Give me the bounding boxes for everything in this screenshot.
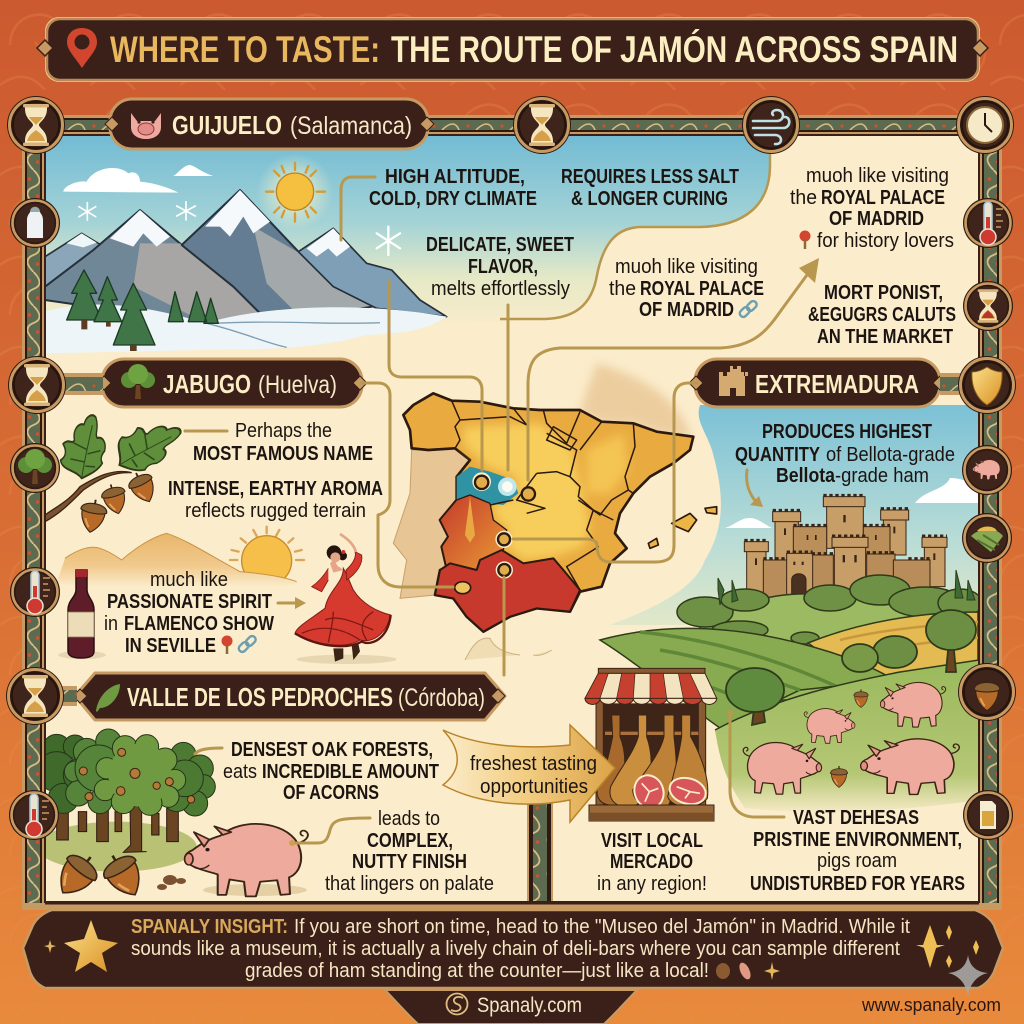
icon: small sparkle bbox=[44, 940, 56, 953]
text: highest quantity bbox=[735, 420, 955, 487]
icon: clock bbox=[956, 96, 1014, 154]
Extremadura bbox=[440, 495, 507, 570]
illustration: oak branch bbox=[45, 408, 188, 534]
text: dehesas: PRISTINE ENVIRONMENT, bbox=[753, 828, 962, 851]
icon: tree bbox=[121, 364, 155, 399]
icon: wine bottle bbox=[58, 569, 106, 659]
text: market: AN THE MARKET bbox=[817, 325, 953, 348]
text: mercado: VISIT LOCAL bbox=[601, 829, 703, 852]
text: mercado: MERCADO bbox=[610, 850, 693, 873]
text: flamenco bbox=[104, 568, 275, 657]
icon: sparkles bbox=[916, 925, 979, 968]
panel: Jabugo bbox=[45, 359, 397, 664]
text: royal palace history bbox=[790, 164, 954, 252]
icon: leaf bbox=[96, 684, 120, 712]
region borders bbox=[452, 401, 635, 590]
text: highest quantity: QUANTITY bbox=[735, 443, 820, 466]
text: nutty finish: NUTTY FINISH bbox=[352, 850, 467, 873]
Portugal bbox=[393, 448, 470, 598]
plate: Jabugo heading: JABUGO bbox=[163, 369, 251, 399]
connector: dehesas bbox=[727, 710, 784, 817]
icon: wind bbox=[742, 96, 800, 154]
text: most famous: MOST FAMOUS NAME bbox=[193, 442, 373, 465]
icon: pig bbox=[962, 445, 1012, 495]
illustration: mountains and snow bbox=[45, 153, 447, 353]
icon: field bbox=[962, 513, 1012, 563]
text: highest quantity: Bellota bbox=[776, 464, 836, 487]
text: flavor: melts effortlessly bbox=[431, 277, 571, 300]
text: insight: grades of ham standing at the counter—just like a local! bbox=[245, 960, 709, 982]
divider: market column bbox=[527, 790, 553, 908]
icons: pin and link bbox=[222, 635, 257, 654]
text: highest quantity: PRODUCES HIGHEST bbox=[762, 420, 932, 443]
icon: hourglass top left bbox=[7, 96, 65, 154]
frame bands bbox=[22, 115, 1002, 910]
icon: cheese card bbox=[963, 790, 1013, 840]
text: highest quantity: -grade ham bbox=[835, 464, 929, 487]
text: highest quantity: of Bellota-grade bbox=[826, 443, 955, 466]
text: curing bbox=[561, 165, 739, 210]
text: oak forests: DENSEST OAK FORESTS, bbox=[231, 738, 433, 761]
text: flamenco: FLAMENCO SHOW bbox=[124, 612, 275, 635]
arrow: to dancer bbox=[278, 597, 306, 609]
text: aroma: INTENSE, EARTHY AROMA bbox=[168, 477, 383, 500]
text: most famous bbox=[193, 419, 373, 465]
plate: Valle heading: VALLE DE LOS PEDROCHES bbox=[127, 682, 393, 712]
text: royal palace: ROYAL PALACE bbox=[640, 277, 764, 300]
icon: thermometer right bbox=[963, 198, 1013, 248]
text: market: MORT PONIST, bbox=[824, 281, 943, 304]
text: insight: If you are short on time, head to the "Museo del Jamón" in Madrid. While it bbox=[294, 916, 910, 938]
icon: salt shaker bbox=[10, 198, 60, 248]
content base panel bbox=[45, 135, 979, 905]
title text: WHERE TO TASTE: bbox=[110, 29, 380, 70]
plate: Valle heading: (Córdoba) bbox=[398, 684, 485, 712]
plate: Guijuelo heading: GUIJUELO bbox=[172, 110, 282, 140]
connector: famous bbox=[185, 430, 227, 432]
illustration: hills and sun bbox=[57, 527, 304, 591]
illustration: market stall bbox=[585, 668, 717, 821]
text: royal palace history: OF MADRID bbox=[829, 207, 924, 230]
text: dehesas: pigs roam bbox=[817, 849, 897, 872]
text: royal palace bbox=[609, 255, 764, 321]
text: flamenco: IN SEVILLE bbox=[125, 634, 216, 657]
illustration: pig bbox=[185, 824, 308, 896]
clouds bbox=[725, 478, 979, 528]
plate: Jabugo heading bbox=[97, 359, 367, 407]
icon: watermark star bbox=[948, 955, 988, 996]
text: dehesas: VAST DEHESAS bbox=[793, 806, 919, 829]
icon: tree bbox=[10, 443, 60, 493]
text: royal palace history: muoh like visiting bbox=[806, 164, 949, 187]
text: nutty finish bbox=[325, 807, 494, 895]
footer tab bbox=[385, 990, 637, 1024]
icon: logo bbox=[446, 994, 468, 1014]
text: flavor: DELICATE, SWEET bbox=[426, 233, 574, 256]
title banner bbox=[37, 17, 988, 82]
connector lines bbox=[341, 177, 819, 675]
text: most famous: Perhaps the bbox=[235, 419, 332, 442]
icons: acorn, ham and sparkles bbox=[716, 961, 780, 981]
map of Spain bbox=[393, 363, 717, 660]
pigs bbox=[743, 682, 959, 794]
Ceuta and coast bbox=[465, 638, 552, 660]
arrow: to castle bbox=[747, 470, 763, 507]
text: market bbox=[808, 281, 956, 348]
text: curing: & LONGER CURING bbox=[571, 187, 728, 210]
Salamanca bbox=[457, 467, 518, 505]
icon: map pin bbox=[67, 28, 97, 68]
icon: hourglass top centre bbox=[513, 96, 571, 154]
text: nutty finish: that lingers on palate bbox=[325, 872, 494, 895]
illustration: flamenco dancer bbox=[295, 534, 397, 664]
text: oak forests: eats bbox=[223, 760, 257, 783]
icon: acorn bbox=[958, 663, 1016, 721]
illustration: castle bbox=[744, 495, 947, 600]
text: aroma: reflects rugged terrain bbox=[185, 499, 366, 522]
text: dehesas bbox=[750, 806, 965, 895]
icon: hourglass bbox=[8, 356, 66, 414]
icon: hourglass bbox=[6, 667, 64, 725]
panel: Guijuelo bbox=[45, 135, 956, 360]
map markers bbox=[455, 472, 535, 594]
plate: Valle heading bbox=[73, 673, 505, 720]
text: insight: SPANALY INSIGHT: bbox=[131, 916, 288, 938]
plate: Guijuelo heading bbox=[105, 99, 434, 149]
text: flavor: FLAVOR, bbox=[468, 255, 538, 278]
text: aroma bbox=[168, 477, 383, 522]
illustration: hills and fields bbox=[600, 570, 982, 812]
icon: thermometer bbox=[10, 567, 60, 617]
connector: pig bbox=[289, 818, 370, 846]
icon: pig face bbox=[131, 113, 161, 139]
text: royal palace history: for history lovers bbox=[817, 229, 954, 252]
text: insight: sounds like a museum, it is actually a lively chain of deli-bars where you can sample different bbox=[131, 938, 900, 960]
text: royal palace: muoh like visiting bbox=[615, 255, 758, 278]
trees bbox=[726, 610, 976, 725]
plate: Guijuelo heading: (Salamanca) bbox=[290, 112, 412, 140]
icon: gold star bbox=[64, 920, 118, 972]
text: site name: Spanaly.com bbox=[477, 994, 582, 1017]
icon: shield bbox=[958, 356, 1016, 414]
plate: Extremadura heading bbox=[689, 359, 947, 407]
text: climate: HIGH ALTITUDE, bbox=[385, 165, 525, 188]
text: climate bbox=[369, 165, 537, 210]
text: mercado: in any region! bbox=[597, 872, 707, 895]
title text bbox=[110, 28, 958, 70]
text: nutty finish: leads to bbox=[378, 807, 440, 830]
text: mercado bbox=[597, 829, 707, 895]
text: flamenco: in bbox=[104, 612, 118, 635]
panel: Valle de los Pedroches bbox=[37, 673, 505, 904]
footer url: www.spanaly.com bbox=[861, 995, 1001, 1015]
sky area bbox=[45, 135, 770, 360]
icon: red hourglass bbox=[963, 281, 1013, 331]
illustration: oak forest bbox=[37, 729, 215, 872]
text: royal palace history: ROYAL PALACE bbox=[821, 186, 945, 209]
icon: small pin bbox=[800, 230, 810, 249]
text: oak forests: INCREDIBLE AMOUNT bbox=[262, 760, 439, 783]
text: oak forests: OF ACORNS bbox=[283, 781, 379, 804]
text: insight bbox=[131, 916, 910, 982]
text: curing: REQUIRES LESS SALT bbox=[561, 165, 739, 188]
illustration: big acorns bbox=[49, 846, 186, 904]
connector: forest bbox=[195, 748, 222, 754]
Andalusia bbox=[435, 550, 580, 632]
text: oak forests bbox=[223, 738, 439, 804]
text: flavor bbox=[426, 233, 574, 300]
arrow: tasting bbox=[443, 725, 615, 822]
arrow: tasting: freshest tasting bbox=[470, 752, 597, 775]
Spain bbox=[403, 393, 693, 632]
icon: chain link bbox=[738, 300, 758, 318]
plate: Extremadura heading: EXTREMADURA bbox=[755, 369, 919, 399]
Balearic islands bbox=[648, 507, 717, 548]
text: royal palace: OF MADRID bbox=[639, 298, 734, 321]
sky bbox=[610, 405, 979, 625]
plate: Jabugo heading: (Huelva) bbox=[258, 371, 337, 399]
medallions bbox=[6, 96, 1016, 840]
text: dehesas: UNDISTURBED FOR YEARS bbox=[750, 872, 965, 895]
text: nutty finish: COMPLEX, bbox=[367, 829, 453, 852]
insight panel bbox=[23, 910, 1003, 996]
icon: thermometer bbox=[9, 790, 59, 840]
text: flamenco: PASSIONATE SPIRIT bbox=[107, 590, 272, 613]
text: royal palace: the bbox=[609, 277, 636, 300]
icon: castle bbox=[719, 366, 748, 396]
text: market: &EGUGRS CALUTS bbox=[808, 303, 956, 326]
arrow: tasting: opportunities bbox=[480, 775, 588, 798]
text: flamenco: much like bbox=[150, 568, 228, 591]
panel: Extremadura bbox=[600, 359, 982, 895]
text: royal palace history: the bbox=[790, 186, 817, 209]
text: climate: COLD, DRY CLIMATE bbox=[369, 187, 537, 210]
